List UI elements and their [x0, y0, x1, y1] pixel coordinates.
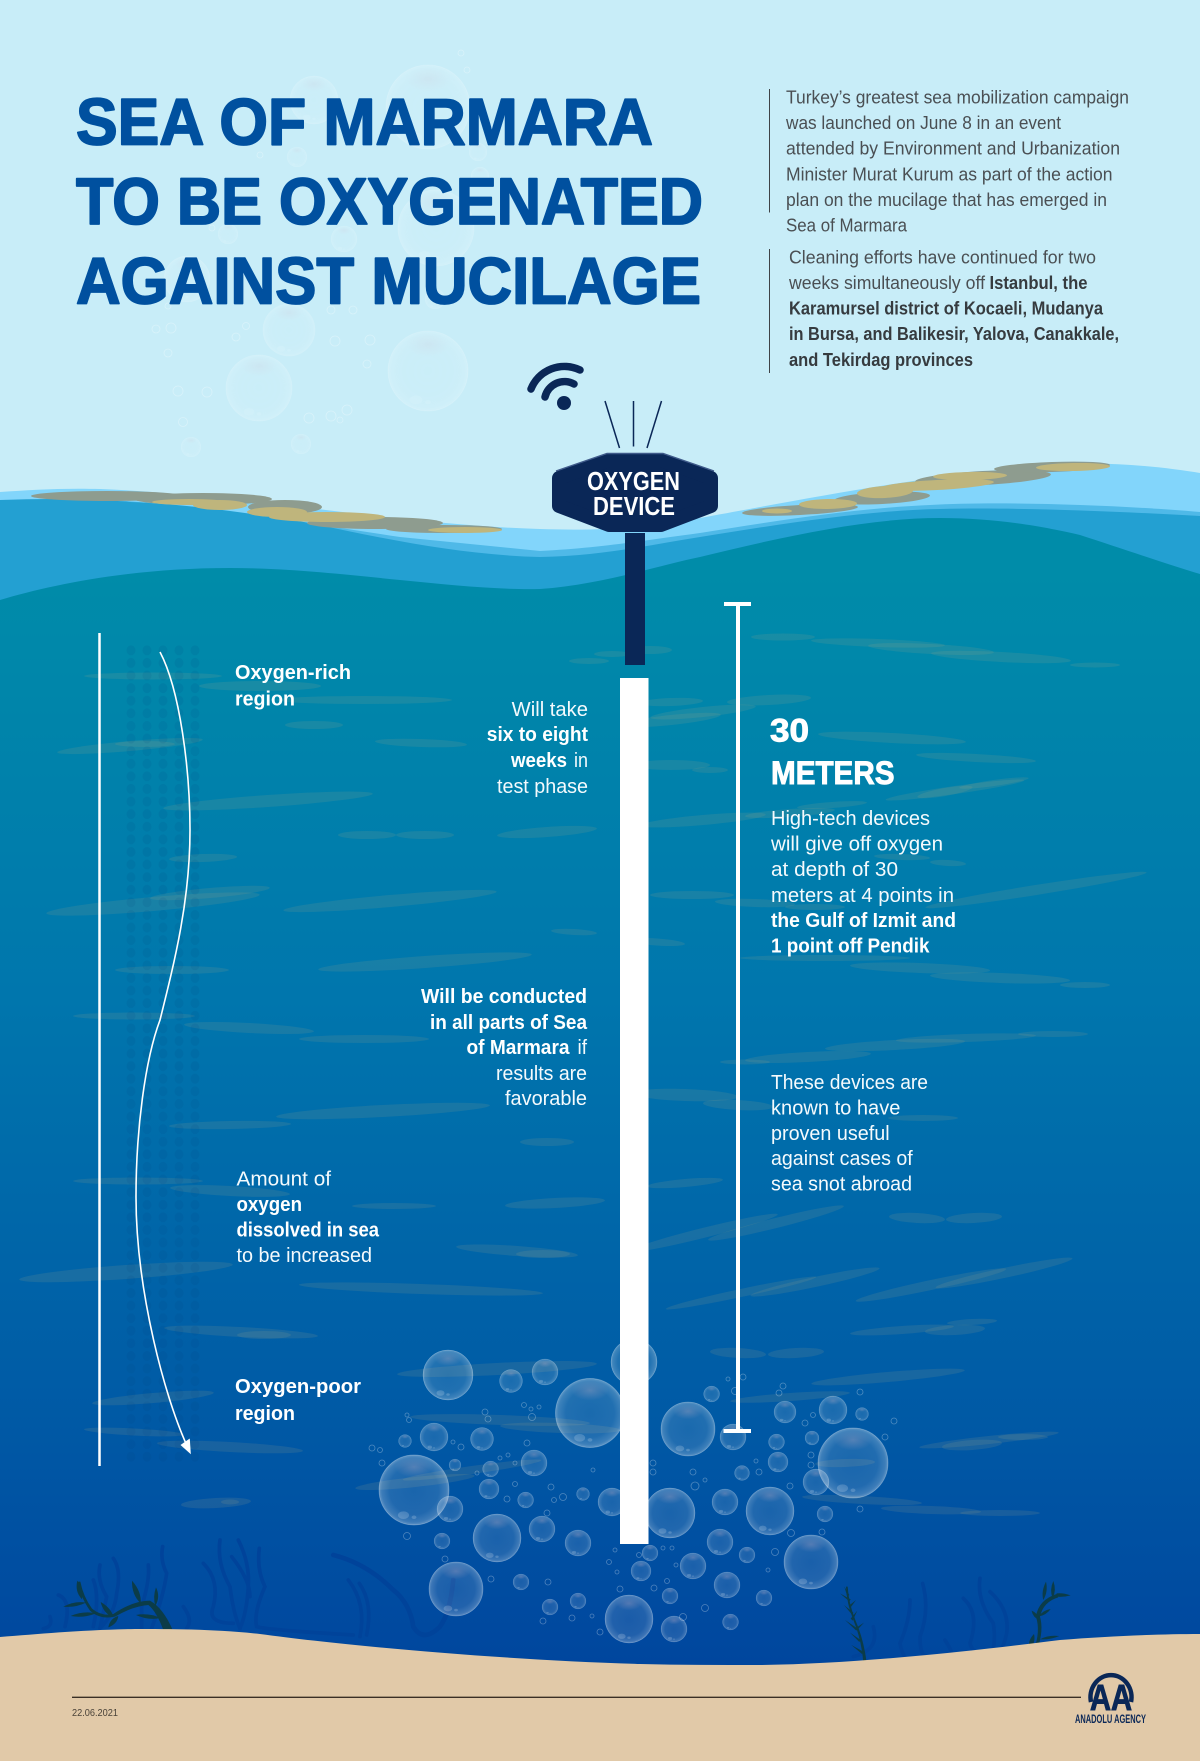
- text: all parts of sea: Will be conducted: [421, 986, 587, 1008]
- label: oxygen-poor region: Oxygen-poor: [235, 1376, 361, 1398]
- footer rule: [72, 1696, 1081, 1698]
- intro paragraph 2: in Bursa, and Balikesir, Yalova, Canakkale,: [789, 324, 1119, 344]
- label: oxygen-rich region: [235, 662, 351, 710]
- sand seabed: [0, 1629, 1200, 1761]
- oxygen device sign: [556, 454, 714, 525]
- text: all parts of sea: in all parts of Sea: [430, 1012, 588, 1034]
- surface mucilage right: [742, 460, 1110, 518]
- icon: wifi: [531, 366, 580, 410]
- text: high-tech devices: meters at 4 points in: [771, 885, 954, 907]
- text: high-tech devices: 1 point off Pendik: [771, 936, 930, 958]
- text: all parts of sea: if: [578, 1037, 587, 1059]
- label: oxygen-rich region: Oxygen-rich: [235, 662, 351, 684]
- label: amount of oxygen dissolved: [236, 1168, 380, 1267]
- text: high-tech devices: the Gulf of Izmit and: [771, 910, 956, 932]
- intro paragraph 2: [770, 248, 1119, 373]
- oxygen gradient scale: [100, 633, 204, 1466]
- oxygen device sign: OXYGEN: [587, 466, 680, 496]
- label: amount of oxygen dissolved: dissolved in sea: [236, 1220, 380, 1242]
- title: SEA OF MARMARA: [76, 84, 653, 158]
- green seaweed left: [63, 1581, 173, 1630]
- text: test phase: weeks: [510, 750, 567, 772]
- oxygen device sign: DEVICE: [593, 491, 675, 521]
- label: amount of oxygen dissolved: to be increased: [236, 1245, 372, 1267]
- logo: Anadolu Agency: [1075, 1675, 1146, 1726]
- label: oxygen-poor region: region: [235, 1403, 295, 1425]
- title: AGAINST MUCILAGE: [76, 244, 701, 318]
- intro paragraph 1: plan on the mucilage that has emerged in: [786, 190, 1107, 210]
- text: all parts of sea: [421, 986, 588, 1110]
- sky background: [0, 0, 1200, 800]
- green seaweed right: [840, 1581, 1071, 1663]
- label: oxygen-rich region: region: [235, 688, 295, 710]
- intro paragraph 2: Karamursel district of Kocaeli, Mudanya: [789, 299, 1104, 319]
- label: amount of oxygen dissolved: Amount of: [236, 1168, 331, 1190]
- depth heading: 30: [770, 713, 809, 749]
- text: test phase: [487, 699, 588, 798]
- intro paragraph 1: [770, 88, 1129, 236]
- date: 22.06.2021: [72, 1708, 118, 1719]
- intro paragraph 1: Sea of Marmara: [786, 216, 908, 236]
- wave layers: [0, 464, 1200, 800]
- depth heading: [770, 713, 894, 791]
- text: sea snot abroad: These devices are: [771, 1072, 928, 1094]
- seaweed silhouettes left: [43, 1540, 453, 1637]
- text: test phase: six to eight: [487, 724, 588, 746]
- white diffuser pole: [620, 678, 648, 1544]
- text: sea snot abroad: proven useful: [771, 1123, 890, 1145]
- label: oxygen-poor region: [235, 1376, 361, 1425]
- curved arrow: [136, 652, 190, 1454]
- text: sea snot abroad: known to have: [771, 1097, 900, 1119]
- text: high-tech devices: at depth of 30: [771, 859, 898, 881]
- intro paragraph 1: was launched on June 8 in an event: [785, 113, 1061, 133]
- intro paragraph 2: Istanbul, the: [990, 273, 1088, 293]
- vertical scale line: [98, 633, 101, 1466]
- dot column texture: [124, 644, 204, 1463]
- text: high-tech devices: will give off oxygen: [770, 834, 943, 856]
- text: high-tech devices: High-tech devices: [771, 808, 930, 830]
- intro paragraph 1: Minister Murat Kurum as part of the action: [786, 164, 1112, 184]
- text: test phase: test phase: [497, 776, 588, 798]
- intro paragraph 2: and Tekirdag provinces: [789, 350, 973, 370]
- text: all parts of sea: favorable: [505, 1088, 587, 1110]
- logo: Anadolu Agency: ANADOLU AGENCY: [1075, 1712, 1146, 1726]
- navy pole: [625, 533, 645, 665]
- text: test phase: in: [574, 750, 588, 772]
- text: sea snot abroad: against cases of: [771, 1148, 913, 1170]
- underwater mucilage streaks: [19, 634, 1147, 1516]
- seaweed silhouettes right: [853, 1578, 1007, 1660]
- surface mucilage left: [31, 491, 502, 533]
- intro paragraph 2: Cleaning efforts have continued for two: [789, 248, 1096, 268]
- underwater bubbles: [369, 1339, 897, 1643]
- title: [76, 84, 703, 318]
- depth scale: 30 meters: [724, 602, 751, 1433]
- depth heading: METERS: [771, 755, 894, 791]
- title: TO BE OXYGENATED: [76, 164, 703, 238]
- label: amount of oxygen dissolved: oxygen: [236, 1194, 302, 1216]
- text: sea snot abroad: [771, 1072, 928, 1196]
- text: all parts of sea: results are: [496, 1063, 587, 1085]
- text: all parts of sea: of Marmara: [466, 1037, 570, 1059]
- intro paragraph 1: attended by Environment and Urbanization: [786, 139, 1120, 159]
- intro paragraph 1: Turkey’s greatest sea mobilization campaign: [786, 88, 1129, 108]
- text: test phase: Will take: [512, 699, 588, 721]
- sky bubbles: [152, 50, 489, 457]
- logo: Anadolu Agency: AA: [1090, 1677, 1132, 1718]
- text: high-tech devices: [770, 808, 956, 958]
- sea body: [0, 518, 1200, 1700]
- antenna signal lines: [605, 401, 662, 448]
- text: sea snot abroad: sea snot abroad: [771, 1174, 912, 1196]
- intro paragraph 2: weeks simultaneously off: [788, 273, 986, 293]
